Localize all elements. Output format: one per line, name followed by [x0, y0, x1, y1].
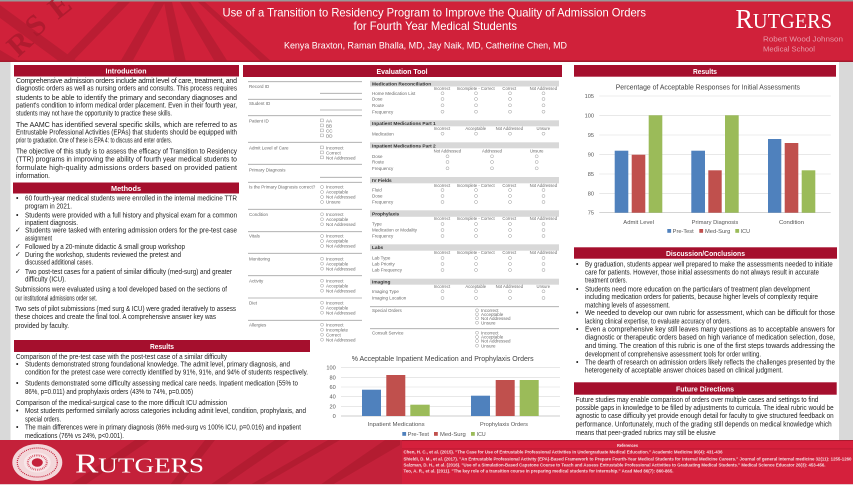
text block: results comparison: Comparison of the pre-test case with the post-test case of a similar difficulty	[16, 354, 227, 361]
form: special orders and consult service	[370, 307, 559, 348]
form: prophylaxis: Not Addressed	[530, 216, 558, 221]
reference list: Teo, A. R., et al. (2011). "The key role of a transition course in preparing medical students for internship." Acad Med 86(7): 860-865.	[404, 469, 674, 474]
form: left column fields: Is the Primary Diagnosis correct?	[249, 185, 316, 190]
form: left column fields: Vitals	[249, 234, 261, 239]
text block: discussion bullets: heterogeneity of acceptable answer choices based on clinical judgment.	[585, 367, 783, 374]
form: left column fields: Primary Diagnosis	[249, 167, 286, 172]
text block: methods list: Followed by a 20-minute didactic & small group workshop	[25, 244, 185, 251]
bar chart: acceptable inpatient medication and prophylaxis orders: 0	[333, 414, 336, 420]
form: left column fields: Acceptable	[326, 283, 349, 288]
form: inpatient medications part 2: Unsure	[530, 148, 544, 154]
form: medication reconciliation: Incomplete - Correct	[457, 86, 496, 91]
form: left column fields: CC	[326, 128, 333, 133]
text block: discussion bullets: •	[576, 286, 579, 293]
form: iv fields: Correct	[502, 183, 517, 188]
form: left column fields: Acceptable	[326, 261, 349, 266]
form: special orders and consult service: Consult Service	[372, 330, 404, 335]
text block: results comparison: •	[16, 362, 19, 369]
form: left column fields: Incorrect	[326, 256, 344, 261]
text block: methods list: Two post-test cases for a patient of similar difficulty (med-surg) and greater	[25, 269, 233, 276]
form: left column fields: Not Addressed	[326, 266, 356, 271]
title: Use of a Transition to Residency Program to Improve the Quality of Admission Orders	[222, 6, 646, 20]
text block: discussion bullets: •	[576, 359, 579, 366]
form: left column fields: Unsure	[326, 200, 341, 205]
reference heading: References	[617, 443, 638, 448]
form: imaging: Imaging	[372, 279, 390, 285]
text block: introduction: patient's condition to inform medical order placement. Even in their fourth year,	[16, 103, 237, 110]
header banner: R	[1, 24, 39, 63]
text block: methods list: •	[16, 212, 19, 219]
form: inpatient medications part 1: Incorrect	[434, 126, 451, 131]
text block: methods list: program in 2021.	[25, 203, 72, 210]
text block: discussion bullets: including medication orders for patients, because higher levels of complexity require	[585, 294, 818, 301]
text block: methods list: assignment	[25, 236, 52, 243]
text block: methods evaluation: our institutional admissions order set.	[15, 296, 97, 303]
form: left column fields: Allergies	[249, 322, 267, 327]
form: labs: Lab Priority	[372, 262, 396, 267]
chart title: % Acceptable Inpatient Medication and Prophylaxis Orders	[352, 354, 534, 363]
form: medication reconciliation: Correct	[502, 86, 517, 91]
form: inpatient medications part 1: Inpatient Medications Part 1	[372, 121, 436, 127]
text block: methods list: discussed additional cases.	[25, 260, 93, 267]
text block: introduction: The AAMC has identified several specific skills, which are referred to as	[16, 122, 237, 129]
form: iv fields: IV Fields	[372, 178, 392, 184]
form: labs: Incomplete - Correct	[457, 250, 496, 255]
text block: methods list: During the workshop, students reviewed the pretest and	[25, 252, 181, 259]
text block: introduction	[16, 78, 237, 180]
text block: future directions: agnostic to case difficulty yet provide enough detail for faculty to give structured feedback on	[576, 413, 834, 420]
bar chart: percentage of acceptable responses for initial assessments: Primary Diagnosis	[692, 220, 739, 226]
footer banner	[0, 440, 853, 485]
chart legend: Pre-Test	[673, 229, 694, 235]
form: left column fields: Not Addressed	[326, 310, 356, 315]
heading: results right: Results	[693, 67, 717, 76]
text block: introduction: students may not have the opportunity to practice these skills.	[16, 111, 172, 118]
form: left column fields: Monitoring	[249, 256, 271, 261]
panel: references	[402, 440, 853, 484]
bar chart: percentage of acceptable responses for initial assessments: 85	[588, 172, 594, 178]
form: iv fields: Fluid	[372, 188, 382, 193]
panel: evaluation tool	[243, 65, 562, 348]
logo: Rutgers Robert Wood Johnson Medical School: Medical School	[763, 44, 815, 54]
bar chart: percentage of acceptable responses for initial assessments: 75	[588, 211, 594, 217]
chart legend	[667, 229, 750, 235]
text block: introduction: formulate high-quality admissions orders based on provided patient	[16, 165, 237, 172]
form: special orders and consult service: Special Orders	[372, 308, 403, 313]
form: left column fields: BB	[326, 123, 332, 128]
form: left column fields: Not Addressed	[326, 222, 356, 227]
text block: discussion bullets: development of comprehensive assessment tools for order writing.	[585, 351, 761, 358]
chart legend: Med-Surg	[705, 229, 730, 235]
form: medication reconciliation: Frequency	[372, 109, 394, 114]
bar chart: acceptable inpatient medication and prophylaxis orders: 60	[329, 385, 336, 391]
chart legend	[402, 432, 486, 438]
text block: results comparison: Students demonstrated strong foundational knowledge. The admit level, primary diagnosis, and	[25, 362, 290, 369]
form: left column fields: Incorrect	[326, 234, 344, 239]
bar chart: acceptable inpatient medication and prophylaxis orders: 80	[329, 376, 336, 382]
bar chart: percentage of acceptable responses for initial assessments: 95	[588, 133, 594, 139]
form: medication reconciliation	[370, 81, 559, 114]
text block: results comparison: •	[16, 424, 19, 431]
form: left column fields: Incorrect	[326, 322, 344, 327]
form: special orders and consult service: Not Addressed	[481, 339, 511, 344]
text block: results comparison: medications (76% vs 24%, p<0.001).	[25, 433, 124, 440]
text block: discussion bullets: •	[576, 327, 579, 334]
form: medication reconciliation: Medication Reconciliation	[372, 81, 431, 87]
text block: discussion bullets: lacking clinical expertise, to evaluate accuracy of orders.	[585, 318, 731, 325]
text block: discussion bullets: matching levels of assessment.	[585, 302, 670, 309]
form: left column fields: DD	[326, 133, 333, 138]
icon: rutgers seal	[12, 444, 62, 481]
form: prophylaxis: Correct	[502, 216, 517, 221]
text block: results comparison: Most students performed similarly across categories including admit level, condition, prophylaxis, and	[25, 408, 306, 415]
text block: methods evaluation: these choices and create the final tool. A comprehensive answer key was	[15, 314, 216, 321]
reference list: Salzman, D. H., et al. (2016). "Use of a Simulation-Based Capstone Course to Teach and Assess Entrustable Professional Activities to Graduating Medical Students." Medical Science Educator 26(3): 453-456.	[404, 463, 826, 468]
form: left column fields: Not Addressed	[326, 155, 356, 160]
form: left column fields: Condition	[249, 212, 269, 217]
text block: future directions: performance. Unfortunately, much of the grading still depends on medical knowledge which	[576, 421, 832, 428]
text block: introduction: prior to graduation. One of these is EPA 4: to discuss and enter orders.	[16, 137, 172, 144]
reference list: Chen, H. C., et al. (2015). "The Case for Use of Entrustable Professional Activities in Undergraduate Medical Education." Academic Medicine 90(4): 431-436	[404, 450, 723, 455]
text block: results comparison	[16, 354, 308, 440]
form: iv fields	[370, 177, 559, 205]
heading: evaluation tool: Evaluation Tool	[376, 67, 428, 76]
text block: methods list: 60 fourth-year medical students were enrolled in the internal medicine TTR	[25, 196, 237, 203]
text block: methods list: ✓	[15, 242, 21, 250]
form: labs: Labs	[372, 245, 384, 251]
authors: Kenya Braxton, Raman Bhalla, MD, Jay Naik, MD, Catherine Chen, MD	[284, 40, 567, 52]
text block: results comparison: condition for the pretest case were correctly identified by 91%, 91%, and 94% of students respectively.	[25, 370, 308, 377]
form: imaging: Imaging Location	[372, 296, 407, 301]
text block: methods list: •	[16, 196, 19, 203]
text block: methods list	[15, 196, 237, 284]
form: left column fields: Acceptable	[326, 239, 349, 244]
form: left column fields: Incorrect	[326, 300, 344, 305]
heading: discussion/conclusions: Discussion/Conclusions	[666, 249, 745, 258]
text block: methods evaluation	[15, 286, 236, 330]
form: inpatient medications part 2: Dose	[372, 154, 383, 159]
form: prophylaxis: Prophylaxis	[372, 211, 400, 217]
text block: methods list: ✓	[15, 226, 21, 234]
form: left column fields: Incorrect	[326, 212, 344, 217]
form: inpatient medications part 2: Frequency	[372, 166, 394, 171]
form: left column fields: Not Addressed	[326, 195, 356, 200]
heading: introduction: Introduction	[106, 66, 147, 76]
text block: results comparison: Comparison of the medical-surgical case to the more difficult ICU admission	[16, 400, 227, 407]
text block: discussion bullets: We needed to develop our own rubric for assessment, which can be difficult for those	[585, 310, 835, 317]
heading: results	[14, 340, 310, 352]
form: imaging: Incorrect	[434, 284, 451, 289]
text block: future directions	[576, 397, 834, 437]
heading: discussion/conclusions	[574, 247, 837, 259]
text block: discussion bullets: and timing. The creation of this rubric is one of the first steps towards addressing the	[585, 343, 835, 350]
logo: Rutgers Robert Wood Johnson Medical School: RUTGERS	[736, 4, 832, 34]
heading: results: Results	[150, 342, 174, 351]
title: for Fourth Year Medical Students	[354, 19, 517, 33]
text block: introduction: information.	[16, 173, 50, 180]
form: special orders and consult service: Unsure	[481, 343, 496, 348]
chart legend: Med-Surg	[440, 432, 466, 438]
text block: introduction: Comprehensive admission orders include admit level of care, treatment, and	[16, 78, 237, 85]
form: imaging: Acceptable	[465, 284, 487, 289]
panel: results right	[574, 65, 836, 235]
reference list	[404, 450, 852, 474]
form: special orders and consult service: Not Addressed	[481, 316, 511, 321]
text block: discussion bullets: Even a comprehensive key still leaves many questions as to acceptable answers for	[585, 327, 836, 334]
bar chart: acceptable inpatient medication and prophylaxis orders: Prophylaxis Orders	[480, 422, 528, 428]
form: imaging	[370, 279, 559, 301]
text block: discussion bullets	[576, 261, 836, 374]
panel: results left	[14, 340, 310, 440]
panel: methods	[13, 182, 239, 330]
form: labs: Correct	[502, 250, 517, 255]
form: left column fields: Correct	[326, 150, 342, 155]
form: medication reconciliation: Not Addressed	[530, 86, 558, 91]
logo: rutgers wordmark: R UTGERS	[75, 448, 204, 478]
form: inpatient medications part 2: Inpatient Medications Part 2	[372, 143, 436, 149]
form: prophylaxis: Incomplete - Correct	[457, 216, 496, 221]
heading: evaluation tool	[243, 65, 562, 77]
text block: results comparison: The main differences were in primary diagnosis (86% med-surg vs 100% ICU, p=0.016) and inpatient	[25, 424, 301, 431]
chart legend: ICU	[741, 229, 750, 235]
bar chart: percentage of acceptable responses for initial assessments	[585, 82, 831, 235]
form: inpatient medications part 2: Route	[372, 160, 385, 165]
form: labs: Lab Type	[372, 256, 391, 261]
chart legend: ICU	[477, 432, 486, 438]
bar chart: percentage of acceptable responses for initial assessments: 90	[588, 153, 594, 159]
form: left column fields: Admit Level of Care	[249, 145, 289, 150]
bar chart: acceptable inpatient medication and prophylaxis orders: Inpatient Medications	[368, 422, 425, 428]
text block: introduction: (TTR) programs in improving the ability of fourth year medical students to	[16, 156, 237, 163]
form: left column fields: Incorrect	[326, 185, 344, 190]
form: left column fields: Incorrect	[326, 145, 344, 150]
bar chart: percentage of acceptable responses for initial assessments: 80	[588, 191, 594, 197]
form: imaging: Imaging Type	[372, 289, 399, 294]
text block: methods list: Students were provided with a full history and physical exam for a common	[25, 212, 237, 219]
form: labs: Incorrect	[434, 250, 451, 255]
logo: Rutgers Robert Wood Johnson Medical School	[736, 4, 843, 54]
text block: results comparison: Students demonstrated some difficulty assessing medical care needs. Inpatient medication (55% to	[25, 381, 298, 388]
form: imaging: Not Addressed	[496, 284, 524, 289]
form: prophylaxis: Incorrect	[434, 216, 451, 221]
form: labs: Lab Frequency	[372, 268, 403, 273]
form: special orders and consult service: Incorrect	[481, 330, 499, 335]
bar chart: acceptable inpatient medication and prophylaxis orders: 40	[329, 395, 336, 401]
bar chart: percentage of acceptable responses for initial assessments: Condition	[779, 220, 804, 226]
form: medication reconciliation: Home Medication List	[372, 91, 416, 96]
text block: introduction: The objective of this study is to assess the efficacy of Transition to Residency	[16, 148, 237, 155]
text block: introduction: students to be able to identify the primary and secondary diagnoses and	[16, 95, 237, 102]
text block: discussion bullets: treatment orders.	[585, 277, 627, 284]
logo: Rutgers Robert Wood Johnson Medical School: Robert Wood Johnson	[763, 34, 843, 44]
form: iv fields: Incomplete - Correct	[457, 183, 496, 188]
heading: methods	[13, 182, 239, 194]
form: special orders and consult service: Unsure	[481, 320, 496, 325]
form: iv fields: Frequency	[372, 200, 394, 205]
form: prophylaxis: Type	[372, 222, 382, 227]
bar chart: percentage of acceptable responses for initial assessments: 100	[585, 113, 594, 119]
form: iv fields: Incorrect	[434, 183, 451, 188]
text block: methods evaluation: Submissions were evaluated using a tool developed based on the sections of	[15, 286, 227, 293]
text block: results comparison: •	[16, 408, 19, 415]
form: left column fields: Acceptable	[326, 190, 349, 195]
text block: discussion bullets: care for patients. However, those initial assessments do not always result in accurate	[585, 270, 819, 277]
text block: results comparison: •	[16, 381, 19, 388]
form: inpatient medications part 1: Acceptable	[465, 126, 487, 131]
header banner: S	[19, 8, 53, 43]
form: inpatient medications part 1: Not Addressed	[496, 126, 524, 131]
header banner	[0, 0, 853, 63]
form: prophylaxis	[370, 210, 559, 239]
text block: introduction: diagnostic orders as well as nursing orders and consults. This process requires	[16, 86, 237, 93]
form: labs	[370, 244, 559, 273]
text block: results comparison: 86%, p=0.011) and prophylaxis orders (43% to 74%, p=0.005)	[25, 389, 193, 396]
text block: methods list: ✓	[15, 250, 21, 258]
heading: future directions: Future Directions	[676, 384, 734, 394]
heading: introduction	[14, 65, 239, 76]
form: inpatient medications part 2: Not Addressed	[434, 148, 462, 154]
form: inpatient medications part 2	[370, 142, 559, 171]
text block: results comparison: special orders.	[25, 416, 61, 423]
panel: introduction	[14, 65, 239, 180]
bar chart: acceptable inpatient medication and prophylaxis orders	[326, 354, 560, 438]
form: inpatient medications part 1: Unsure	[537, 126, 551, 131]
form: special orders and consult service: Incorrect	[481, 308, 499, 313]
form: prophylaxis: Frequency	[372, 234, 394, 239]
title	[222, 6, 646, 33]
text block: discussion bullets: Students need more education on the particulars of treatment plan development	[585, 286, 810, 293]
form: imaging: Unsure	[537, 284, 551, 289]
form: iv fields: Dose	[372, 194, 383, 199]
heading: results right	[574, 65, 836, 77]
text block: methods list: ✓	[15, 268, 21, 276]
form: medication reconciliation: Dose	[372, 97, 383, 102]
form: medication reconciliation: Incorrect	[434, 86, 451, 91]
form: left column fields: Activity	[249, 278, 264, 283]
text block: methods evaluation: provided by faculty.	[15, 323, 69, 330]
form: left column fields: Incorrect	[326, 278, 344, 283]
bar chart: percentage of acceptable responses for initial assessments: 105	[585, 94, 594, 100]
form: left column fields: Correct	[326, 332, 342, 337]
form: left column fields: Not Addressed	[326, 288, 356, 293]
heading: methods: Methods	[111, 184, 141, 193]
form: left column fields: Student ID	[249, 101, 271, 106]
form: iv fields: Not Addressed	[530, 183, 558, 188]
form: left column fields: Acceptable	[326, 217, 349, 222]
form: left column fields	[248, 82, 362, 342]
bar chart: acceptable inpatient medication and prophylaxis orders: 100	[326, 366, 336, 372]
form: left column fields: Not Addressed	[326, 337, 356, 342]
form: left column fields: Patient ID	[249, 118, 270, 123]
text block: methods list: difficulty (ICU).	[25, 277, 66, 284]
form: inpatient medications part 1: Medication	[372, 131, 394, 136]
bar chart: percentage of acceptable responses for initial assessments: Admit Level	[623, 220, 654, 226]
text block: discussion bullets: diagnostic or therapeutic orders based on high variance of medication selection, dose,	[585, 335, 835, 342]
heading: future directions	[574, 382, 837, 395]
form: left column fields: Incomplete	[326, 327, 349, 332]
chart legend: Pre-Test	[408, 432, 429, 438]
text block: methods list: inpatient diagnosis.	[25, 220, 78, 227]
text block: methods list: Students were tasked with entering admission orders for the pre-test case	[25, 228, 237, 235]
form: inpatient medications part 2: Addressed	[482, 148, 503, 154]
form: special orders and consult service: Acceptable	[481, 335, 504, 340]
text block: future directions: means that peer-graded rubrics may still be elusive	[576, 430, 716, 437]
chart title: Percentage of Acceptable Responses for Initial Assessments	[616, 82, 800, 91]
text block: methods evaluation: Two sets of pilot submissions (med surg & ICU) were graded iteratively to assess	[15, 306, 236, 313]
bar chart: acceptable inpatient medication and prophylaxis orders: 20	[329, 404, 336, 410]
panel: future directions	[574, 382, 837, 437]
form: left column fields: Acceptable	[326, 305, 349, 310]
form: left column fields: Record ID	[249, 84, 270, 89]
text block: discussion bullets: •	[576, 310, 579, 317]
form: labs: Not Addressed	[530, 250, 558, 255]
text block: future directions: Future studies may enable comparison of orders over multiple cases and settings to find	[576, 397, 818, 404]
form: special orders and consult service: Acceptable	[481, 312, 504, 317]
text block: introduction: Entrustable Professional Activities (EPAs) that students should be equipped with	[16, 130, 237, 137]
form: left column fields: Diet	[249, 300, 258, 305]
form: left column fields: Not Addressed	[326, 244, 356, 249]
form: medication reconciliation: Route	[372, 103, 385, 108]
form: prophylaxis: Medication or Modality	[372, 228, 418, 233]
form: left column fields: AA	[326, 118, 332, 123]
panel: discussion and conclusions	[574, 247, 837, 374]
text block: discussion bullets: •	[576, 261, 579, 268]
form: inpatient medications part 1	[370, 120, 559, 136]
